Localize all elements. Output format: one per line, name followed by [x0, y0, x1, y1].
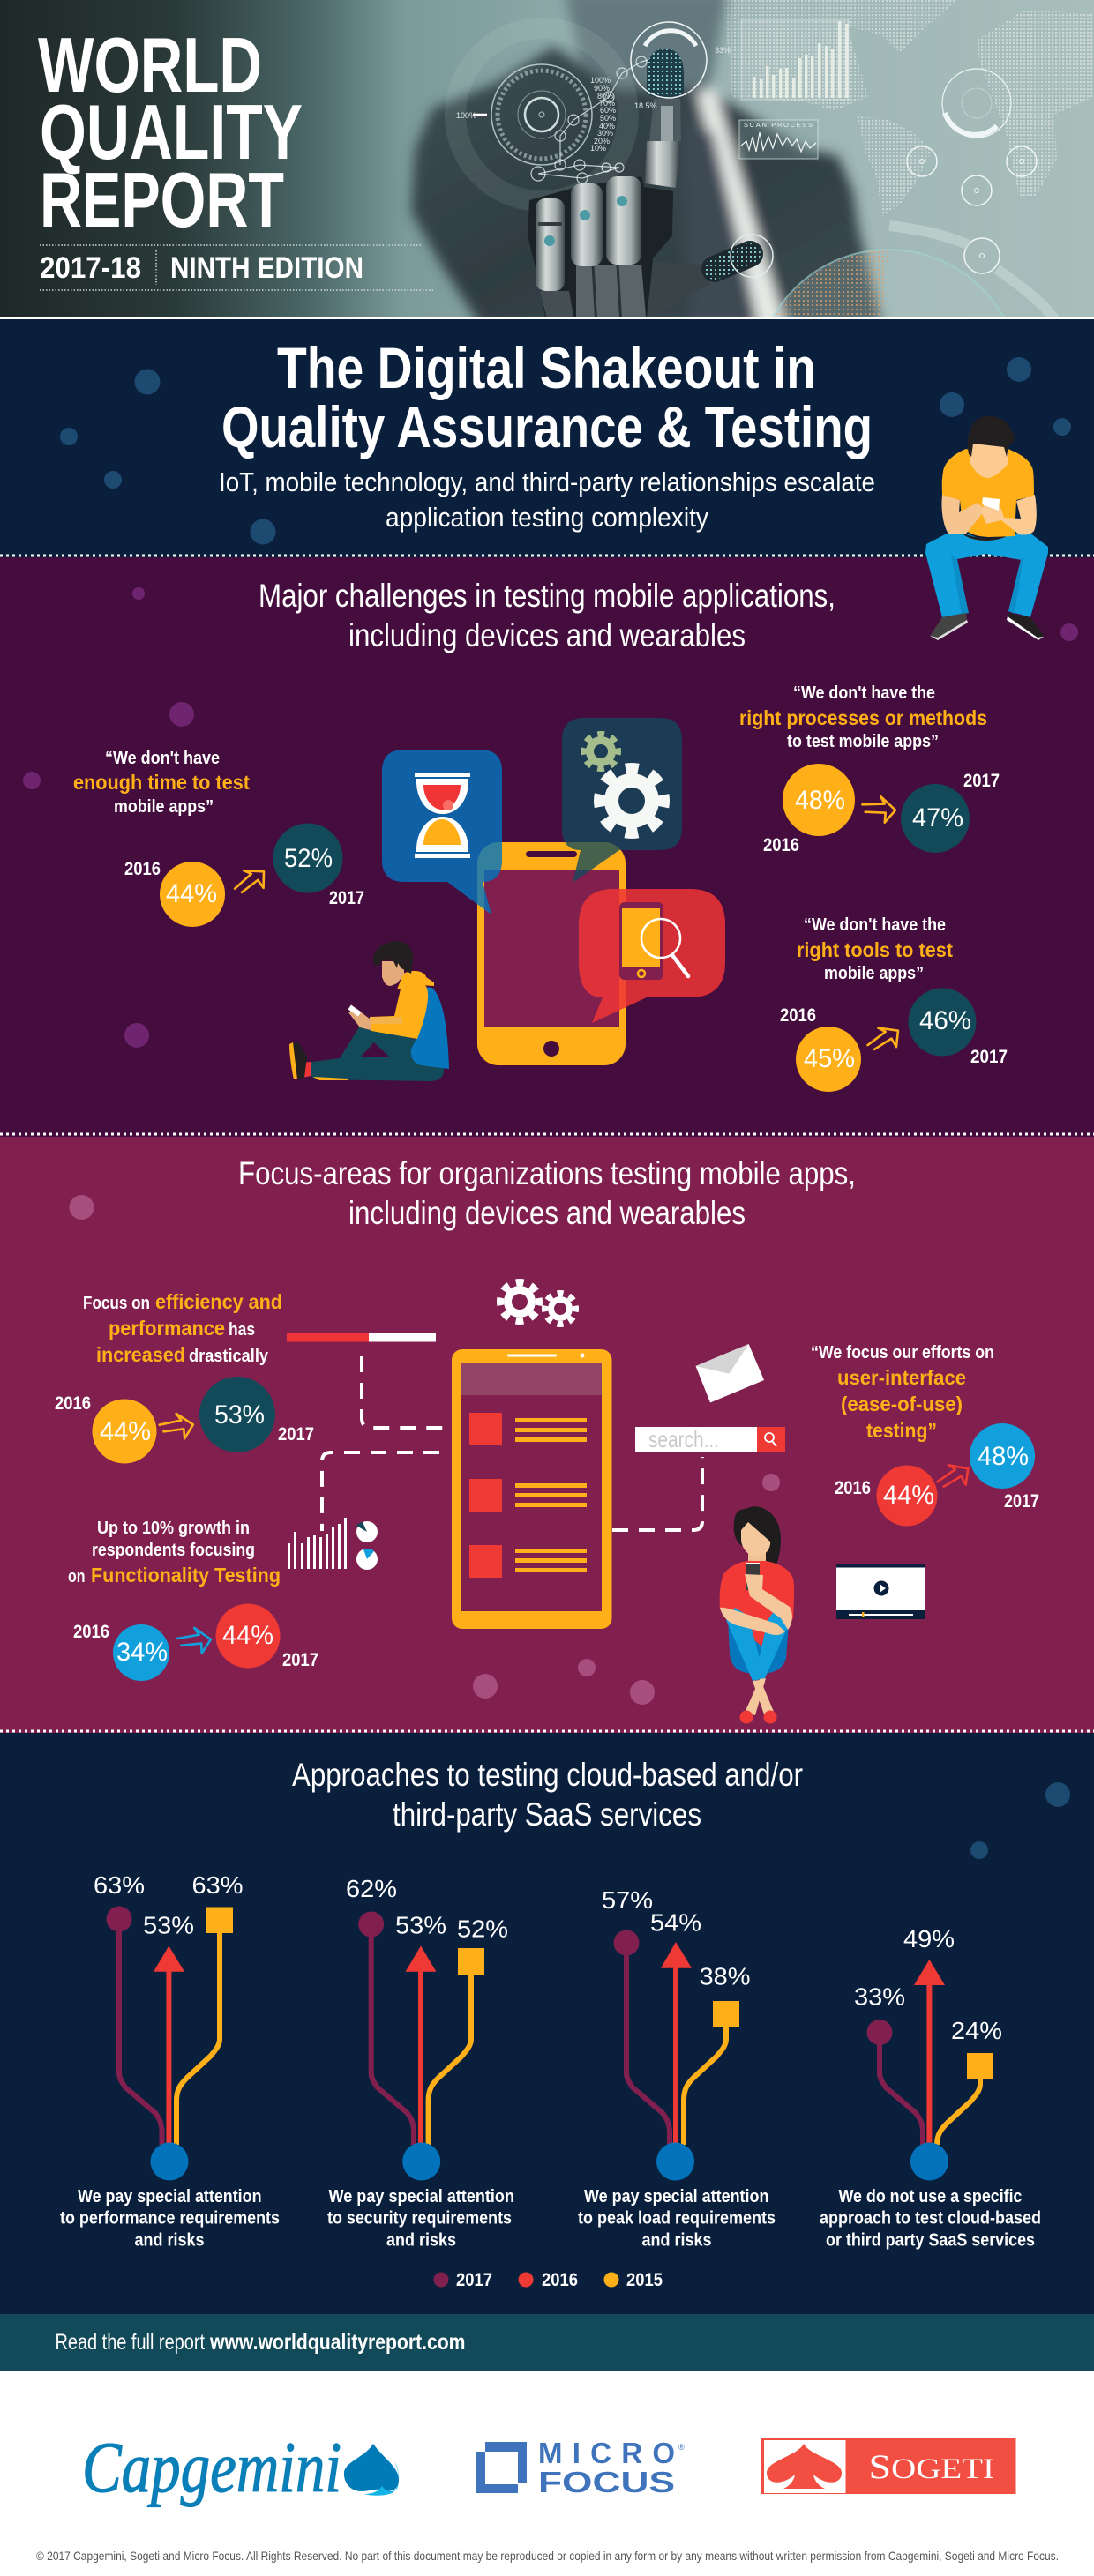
logo: Sogeti: [761, 2438, 1016, 2494]
stat: functionality testing: Up to 10% growth in: [97, 1519, 250, 1538]
chart: security requirements: [327, 1875, 514, 2251]
stat: efficiency and performance: 2016: [55, 1393, 91, 1414]
world map of dots: [723, 0, 1094, 216]
stat: functionality testing: 44%: [222, 1621, 274, 1650]
robot hand: [528, 49, 773, 326]
stat: enough time to test: 52%: [284, 844, 333, 873]
illustration: woman with phone: [720, 1506, 794, 1723]
chart: peak load requirements: to peak load requirements: [578, 2208, 776, 2228]
gauge dials on map: [889, 69, 1059, 326]
main heading: The Digital Shakeout in: [277, 335, 816, 400]
stat: efficiency and performance: 44%: [100, 1417, 151, 1446]
chart: performance requirements: 63%: [94, 1871, 145, 1899]
edition strip: NINTH EDITION: [170, 251, 363, 285]
panel: challenges purple band: [0, 557, 1094, 1137]
scan process panel: SCAN PROCESS: [744, 121, 813, 129]
stat: right tools to test: 45%: [804, 1044, 855, 1073]
phone body: [477, 842, 626, 1065]
stat: functionality testing: [68, 1519, 318, 1681]
stat: user-interface testing: 2017: [1004, 1491, 1039, 1512]
stat: right processes or methods: to test mobile apps”: [787, 732, 939, 751]
stat: right tools to test: 2016: [780, 1005, 816, 1026]
dashed connector: progress bar to phone: [362, 1356, 452, 1428]
stat: right processes or methods: 2017: [963, 771, 1000, 791]
stat: efficiency and performance: efficiency and: [155, 1290, 282, 1313]
chart: peak load requirements: 54%: [650, 1908, 701, 1937]
chart: peak load requirements: 38%: [699, 1963, 750, 1990]
teal bubble with gears: [562, 718, 682, 883]
dotted divider: [0, 1132, 1094, 1136]
panel: read the full report band: www.worldqualityreport.com: [209, 2330, 466, 2355]
report title: QUALITY: [40, 88, 303, 175]
subheading: [219, 467, 875, 533]
stat: functionality testing: Functionality Testing: [91, 1564, 281, 1587]
chart: security requirements: and risks: [386, 2231, 456, 2251]
edition strip: 2017-18: [40, 251, 141, 285]
chart: performance requirements: to performance requirements: [60, 2208, 280, 2228]
panel: white footer: [0, 2371, 1094, 2576]
gears above phone: [500, 1282, 575, 1325]
stat: user-interface testing: 44%: [883, 1481, 934, 1510]
purple decorative dots: [23, 587, 1078, 1048]
stat: enough time to test: mobile apps”: [114, 797, 214, 817]
section heading: challenges: [259, 578, 835, 653]
panel: read the full report band: Read the full report: [55, 2330, 205, 2355]
stat: efficiency and performance: performance: [109, 1317, 225, 1340]
white rule under header: [0, 317, 1094, 319]
stat: functionality testing: 34%: [116, 1638, 168, 1667]
stat: functionality testing: 2016: [73, 1622, 109, 1642]
stat: user-interface testing: [811, 1343, 1039, 1526]
stat: right tools to test: mobile apps”: [824, 964, 924, 983]
HUD percentage labels: 50%: [600, 114, 616, 123]
stat: enough time to test: 2017: [329, 888, 364, 908]
navy decorative dots: [60, 357, 1071, 545]
HUD dial: [455, 28, 628, 201]
illustration: man sitting on divider with phone: [925, 416, 1048, 640]
progress bar icon: [287, 1333, 436, 1342]
stat: right processes or methods: 2016: [763, 835, 799, 855]
HUD percentage labels: 18.5%: [634, 101, 657, 110]
logo: Micro Focus: [476, 2437, 685, 2498]
chart: peak load requirements: and risks: [642, 2231, 711, 2251]
chart: security requirements: We pay special attention: [328, 2187, 514, 2206]
stat: efficiency and performance: [55, 1290, 314, 1464]
HUD percentage labels: 60%: [600, 106, 616, 115]
section heading: approaches: Approaches to testing cloud-based and/or: [292, 1757, 803, 1793]
HUD percentage labels: 40%: [599, 122, 615, 131]
app phone illustration: [452, 1349, 612, 1629]
chart: no specific approach: or third party SaaS services: [826, 2231, 1035, 2251]
stat: right tools to test: 2017: [970, 1047, 1008, 1067]
chart: peak load requirements: 57%: [602, 1886, 653, 1914]
stat: functionality testing: 2017: [282, 1650, 318, 1670]
magenta decorative dots: [69, 1195, 780, 1705]
chart: no specific approach: approach to test cloud-based: [820, 2208, 1041, 2228]
HUD percentage labels: 20%: [594, 137, 610, 146]
illustration: phone with speech bubbles: [382, 718, 725, 1065]
section heading: challenges: including devices and wearables: [348, 617, 746, 653]
HUD bar chart: [741, 20, 849, 100]
stat: functionality testing: respondents focusing: [92, 1541, 255, 1560]
chart: no specific approach: [820, 1925, 1041, 2251]
report title: [38, 21, 303, 243]
stat: functionality testing: on: [68, 1567, 85, 1587]
chart: performance requirements: 53%: [143, 1912, 194, 1938]
dotted divider: [0, 554, 1094, 557]
stat: efficiency and performance: 2017: [278, 1424, 314, 1445]
navy decorative dots: [970, 1782, 1070, 1859]
logo: Capgemini: Capgemini: [82, 2427, 341, 2507]
stat: right tools to test: “We don't have the: [804, 915, 946, 935]
chart: no specific approach: 49%: [903, 1925, 955, 1953]
logo: Micro Focus: MICRO: [538, 2437, 675, 2469]
stat: right processes or methods: right processes or methods: [739, 706, 987, 729]
stat: user-interface testing: “We focus our efforts on: [811, 1343, 994, 1363]
HUD percentage labels: 100%: [590, 76, 611, 85]
stat: efficiency and performance: drastically: [189, 1347, 269, 1366]
stat: right tools to test: 46%: [919, 1006, 971, 1035]
chart: no specific approach: We do not use a specific: [838, 2187, 1022, 2206]
stat: enough time to test: enough time to test: [73, 771, 250, 794]
legend: 2017: [456, 2270, 492, 2290]
chart: security requirements: 53%: [395, 1912, 446, 1938]
stat: user-interface testing: testing”: [866, 1419, 937, 1442]
stat: right tools to test: [780, 915, 1008, 1092]
section heading: focus areas: Focus-areas for organizations testing mobile apps,: [238, 1155, 856, 1191]
envelope icon: [695, 1344, 764, 1402]
HUD percentage labels: 80%: [597, 92, 613, 101]
chart: performance requirements: and risks: [134, 2231, 205, 2251]
logo: Micro Focus: ®: [678, 2443, 685, 2452]
illustration: seated student with backpack: [289, 941, 449, 1081]
stat: user-interface testing: 48%: [978, 1442, 1029, 1471]
HUD percentage labels: [456, 46, 731, 153]
stat: user-interface testing: (ease-of-use): [841, 1393, 963, 1415]
chart: peak load requirements: [578, 1886, 776, 2251]
mini bar chart and pies: [288, 1518, 378, 1570]
section heading: approaches: [292, 1757, 803, 1833]
search box: search...: [648, 1426, 719, 1452]
stat: user-interface testing: 2016: [835, 1478, 871, 1498]
logo: Micro Focus: FOCUS: [538, 2466, 675, 2498]
HUD percentage labels: 70%: [599, 99, 615, 108]
dashed connector: phone to search: [612, 1457, 702, 1530]
stat: efficiency and performance: increased: [96, 1343, 185, 1366]
section heading: focus areas: [238, 1155, 856, 1231]
report title: REPORT: [40, 156, 284, 243]
HUD percentage labels: 100%: [456, 111, 476, 120]
panel: focus areas magenta band: [0, 1137, 1094, 1733]
stat: enough time to test: 44%: [166, 879, 217, 908]
stat: efficiency and performance: has: [229, 1320, 255, 1340]
HUD network lines: [531, 56, 657, 183]
stat: right processes or methods: “We don't have the: [793, 683, 935, 703]
banner background gradient: [0, 0, 1094, 317]
fingertip target ring: [631, 22, 707, 98]
chart: performance requirements: We pay special attention: [78, 2187, 261, 2206]
globe: [772, 249, 1005, 317]
stat: enough time to test: 2016: [124, 859, 161, 879]
dotted divider: [0, 1730, 1094, 1732]
dashed connector: phone to chart: [322, 1452, 439, 1531]
search box: [635, 1426, 785, 1452]
HUD percentage labels: 33%: [715, 46, 731, 55]
stat: user-interface testing: user-interface: [837, 1366, 966, 1389]
stat: efficiency and performance: 53%: [214, 1400, 265, 1430]
panel: intro navy band: [0, 319, 1094, 557]
chart: security requirements: to security requirements: [327, 2208, 512, 2228]
stat: right processes or methods: 48%: [795, 786, 845, 815]
chart: security requirements: 52%: [457, 1915, 508, 1942]
HUD percentage labels: 90%: [594, 84, 610, 93]
panel: read the full report band: [0, 2314, 1094, 2371]
stat: enough time to test: [73, 749, 364, 927]
HUD percentage labels: 30%: [597, 129, 613, 138]
edition strip: [40, 245, 435, 290]
blurred head and suit of businessman: [411, 0, 882, 326]
panel: header photo banner: [0, 0, 1094, 317]
chart: performance requirements: [60, 1871, 280, 2251]
video player icon: [836, 1564, 925, 1619]
panel: approaches navy band: [0, 1733, 1094, 2314]
scan process panel: [739, 120, 818, 159]
section heading: focus areas: including devices and wearables: [348, 1195, 746, 1231]
chart: security requirements: 62%: [346, 1875, 397, 1902]
blue bubble with hourglass: [382, 750, 502, 915]
stat: right processes or methods: 47%: [912, 803, 963, 833]
subheading: IoT, mobile technology, and third-party relationships escalate: [219, 467, 875, 497]
main heading: Quality Assurance & Testing: [221, 394, 873, 459]
chart: performance requirements: 63%: [192, 1871, 244, 1899]
red bubble with phone search: [579, 889, 725, 1023]
subheading: application testing complexity: [386, 502, 708, 533]
legend: [434, 2270, 663, 2290]
section heading: approaches: third-party SaaS services: [393, 1796, 701, 1833]
section heading: challenges: Major challenges in testing mobile applications,: [259, 578, 835, 614]
stat: right tools to test: right tools to test: [797, 938, 953, 961]
legend: 2015: [626, 2270, 663, 2290]
stat: efficiency and performance: Focus on: [83, 1294, 150, 1313]
HUD percentage labels: 10%: [590, 144, 606, 153]
stat: enough time to test: “We don't have: [105, 749, 220, 768]
report title: WORLD: [38, 21, 262, 108]
chart: no specific approach: 24%: [951, 2017, 1002, 2044]
stat: right processes or methods: [739, 683, 1000, 855]
legend: 2016: [542, 2270, 578, 2290]
main heading: [221, 335, 873, 459]
chart: peak load requirements: We pay special attention: [584, 2187, 769, 2206]
chart: no specific approach: 33%: [854, 1982, 905, 2011]
logo: Sogeti: SOGETI: [868, 2448, 994, 2486]
